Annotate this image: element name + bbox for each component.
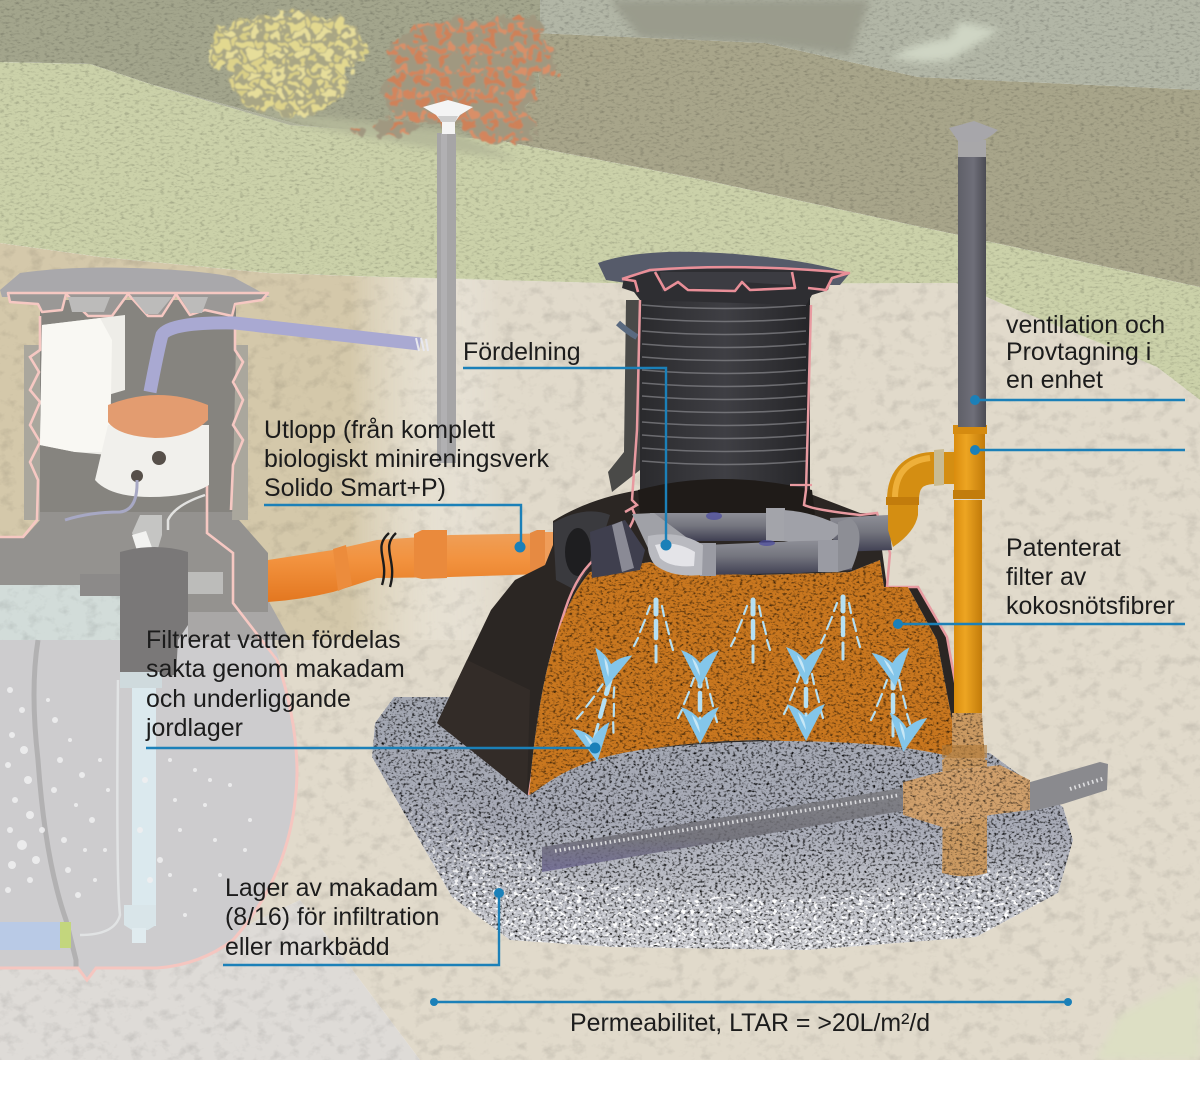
ghosted buried tee and drain pipe (542, 713, 1108, 876)
pale clearing between trees (890, 22, 1000, 62)
tank pink outline (0, 660, 297, 980)
gravel bed (372, 697, 1073, 950)
distribution pipes (590, 508, 892, 578)
center column (120, 547, 188, 675)
gravel/biofilm layer (0, 585, 120, 640)
tank lower body (0, 610, 297, 980)
label: Fördelning: Fördelning (463, 338, 581, 366)
tree trunks dark band (610, 0, 870, 55)
dark throat (638, 479, 815, 515)
riser neck with ribs (529, 295, 981, 795)
label: Permeabilitet (430, 998, 1072, 1037)
tee horizontal (903, 765, 1030, 828)
label: Patenterat filter: kokosnötsfibrer (1006, 592, 1175, 620)
blue sump pipe (0, 922, 60, 950)
label: Filtrerat vatten: Filtrerat vatten fördelas (146, 626, 401, 654)
filter of coconut fibres (529, 560, 955, 795)
hose fittings (152, 451, 166, 465)
outlet pipe from treatment plant, orange (268, 530, 573, 602)
label: ventilation och provtagning (970, 311, 1185, 455)
elbow (648, 534, 703, 576)
label: ventilation och provtagning: Provtagning i (1006, 338, 1151, 366)
tee (954, 428, 985, 492)
filter tank body, black (437, 490, 981, 795)
orange cap (108, 395, 208, 438)
gravel mound foreground (529, 741, 1030, 900)
cover lid top (0, 268, 270, 297)
water direction arrows (572, 647, 927, 765)
pipe left stub (590, 520, 645, 578)
soil left darker (0, 243, 500, 640)
air bubbles (5, 687, 252, 917)
elbow (903, 468, 958, 500)
label: Patenterat filter: filter av (1006, 563, 1087, 591)
label: Lager av makadam: Lager av makadam (225, 874, 438, 902)
small blue stub (618, 323, 637, 337)
hedge left dark (0, 0, 540, 150)
label: Patenterat filter (893, 534, 1185, 629)
cover lid section (8, 293, 268, 316)
grass tuft bottom right (1095, 975, 1200, 1060)
label: Filtrerat vatten: och underliggande (146, 685, 351, 713)
effluent pipe (132, 676, 156, 926)
pipe right stub (830, 515, 892, 552)
white bottom margin (0, 1060, 1200, 1100)
label: Utlopp: Utlopp (från komplett (264, 416, 495, 444)
ribs (642, 305, 806, 464)
label: ventilation och provtagning: en enhet (1006, 366, 1103, 394)
white drum (95, 425, 209, 497)
water droplet sprays (573, 597, 910, 744)
lawn shadow by shrubs (130, 95, 520, 160)
corrugated neck sides (24, 345, 248, 520)
outer black shell (437, 490, 981, 795)
grey zone right of column (188, 600, 290, 640)
icon: orange shrub (351, 12, 558, 143)
pale gravel highlights (372, 757, 1058, 950)
grey vent pipe (949, 121, 998, 427)
label: Fördelning (463, 338, 672, 550)
icon: yellow shrub (206, 11, 368, 116)
left background vent pipe (423, 100, 473, 463)
upper pipe (650, 513, 785, 541)
soil (0, 243, 1200, 1060)
amber vent and sampling pipe (886, 425, 987, 715)
shoulder collar (0, 512, 268, 612)
ground lower left (0, 900, 420, 1060)
neck interior (40, 300, 236, 512)
pink section lines (529, 300, 640, 795)
drain pipe (542, 787, 908, 872)
lower pipe (705, 540, 852, 575)
pipe collar (553, 511, 610, 590)
cowl (958, 140, 986, 157)
label: Utlopp (264, 416, 550, 552)
left tank: complete treatment plant (faded) (0, 268, 428, 980)
white chemical tank (40, 315, 125, 455)
tank partition wall (34, 640, 76, 968)
outer corrugation left (608, 300, 640, 492)
label: Filtrerat vatten: jordlager (145, 714, 243, 742)
label: Utlopp: Solido Smart+P) (264, 474, 446, 502)
label: Permeabilitet: Permeabilitet, LTAR = >20L/m²/d (570, 1009, 930, 1037)
neck wall pink (0, 316, 277, 660)
holes (706, 512, 722, 520)
hedge right (497, 33, 1200, 287)
label: Lager av makadam: eller markbädd (225, 933, 390, 961)
blue hose (150, 323, 420, 392)
tee vertical (942, 713, 987, 876)
label: Filtrerat vatten: sakta genom makadam (146, 655, 405, 683)
label: Lager av makadam (223, 874, 504, 965)
label: Utlopp: biologiskt minireningsverk (264, 445, 550, 473)
label: ventilation och provtagning: ventilation och (1006, 311, 1165, 339)
lawn (0, 62, 1200, 420)
label: Lager av makadam: (8/16) för infiltration (225, 903, 439, 931)
label: Filtrerat vatten (145, 626, 600, 754)
outlet elbow (132, 515, 162, 555)
trees behind hedge (480, 0, 1200, 110)
manhole lid (598, 252, 850, 305)
label: Patenterat filter: Patenterat (1006, 534, 1121, 562)
pipe break mark (381, 533, 396, 587)
